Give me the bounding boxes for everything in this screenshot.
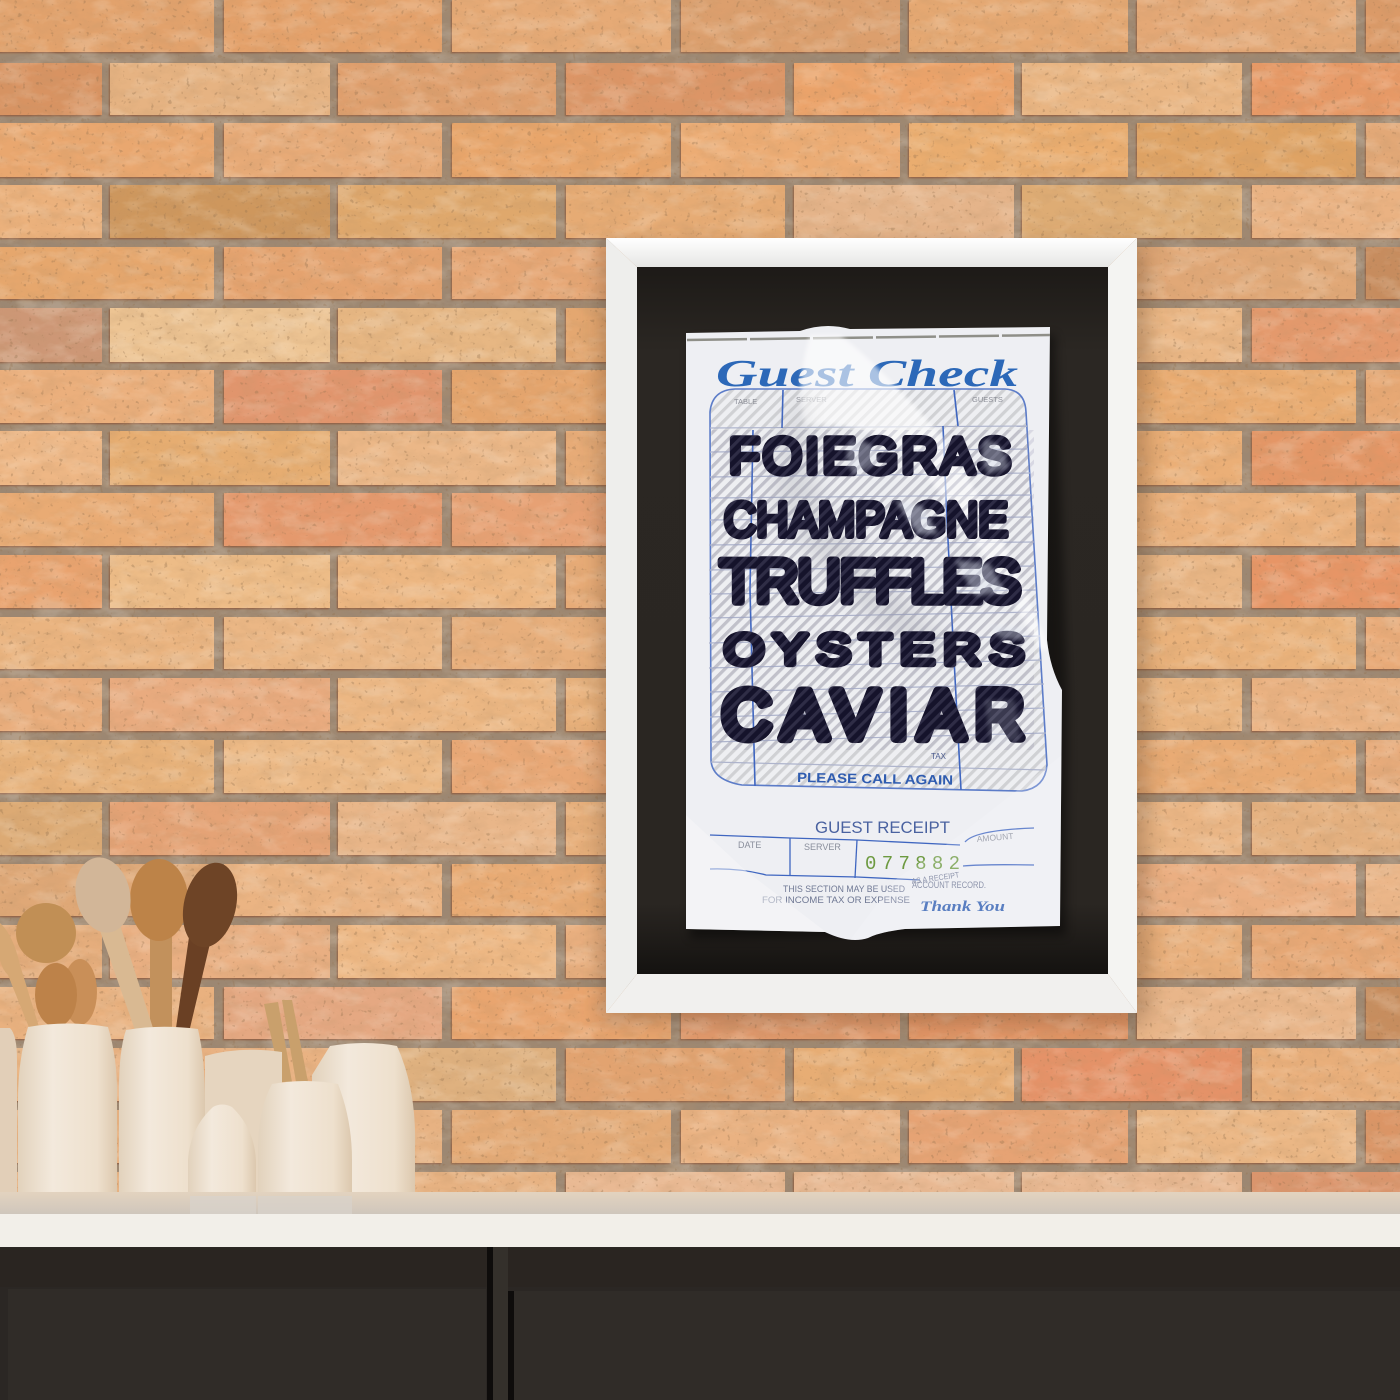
TAX label: TAX [931,752,947,761]
round wooden spoon [16,903,76,963]
thank you: Thank You [920,899,1005,915]
header labels: SERVER [796,395,827,404]
frame bottom rail [606,974,1137,1013]
dark cabinets [0,1247,1400,1400]
crumple highlights over text [712,430,1034,750]
spoon handle [98,925,153,1030]
dark mat [637,267,1108,974]
counter front edge [0,1214,1400,1247]
reflection small vase [190,1196,256,1214]
amount label: AMOUNT [976,831,1014,844]
fine print line 1 right: AS A RECEIPT [911,870,960,886]
vase far left [0,1028,17,1192]
perforated top strip [687,335,1050,340]
bottom fold shading [686,755,1062,940]
frame top rail [606,238,1137,267]
spoon handle [150,925,172,1030]
spoon head [130,859,188,941]
cabinet gap right shadow [508,1291,514,1400]
highlight on champagne [895,500,938,534]
frame shadow [600,245,1148,1023]
paper shadow [690,335,1068,938]
tall vase two [119,1027,205,1192]
fold highlight band [801,335,1050,650]
egg shape right [63,959,97,1025]
item: oysters: OYSTERS [724,626,1024,674]
stick two [282,1000,308,1082]
cabinet center post [493,1247,508,1400]
item: truffles: TRUFFLES [720,548,1021,615]
ledger table [709,389,1047,791]
dark wooden spoon [175,857,245,1028]
ceramic vases [0,1024,415,1196]
header labels: GUESTS [972,395,1003,404]
countertop [0,1192,1400,1247]
please call again: PLEASE CALL AGAIN [797,770,953,788]
ledger outline and hatch [710,389,1047,791]
cabinet top strip left [0,1248,488,1287]
heading: Guest Check: Guest Check [716,353,1018,395]
highlight on caviar [985,700,1020,745]
item: caviar: CAVIAR [722,677,1024,753]
header labels: TABLE [734,397,757,406]
vase back left [205,1050,282,1195]
pale spoon left [0,920,40,1030]
frame left rail [606,238,637,1013]
reflection wide vase [258,1196,352,1214]
bottom left fold [692,868,828,934]
counter surface [0,1192,1400,1214]
cabinet door left [8,1289,486,1400]
fine print line 2 left: FOR INCOME TAX OR EXPENSE [762,895,910,906]
fine print line 2 right: ACCOUNT RECORD. [912,880,986,891]
fold shadow [772,402,944,658]
highlight on G of FOIEGRAS [847,441,878,476]
stick one [264,1002,292,1082]
bottom right fold [850,755,1062,940]
menu items [720,428,1024,753]
white picture frame [606,238,1137,1013]
wide vase [258,1081,352,1195]
small bud vase [188,1104,256,1196]
ledger rows [709,426,1046,770]
vase reflections [190,1196,352,1214]
receipt fine print [762,870,986,906]
pale wooden spoon [69,852,153,1030]
egg shape left [35,963,77,1027]
cabinet top strip right [508,1248,1400,1287]
cabinet gap left shadow [487,1247,493,1400]
receipt lines [710,828,1034,880]
receipt table [710,828,1034,880]
header labels [734,395,1003,406]
highlight on LE of truffles [955,560,1005,596]
vase back right [312,1043,415,1193]
tall wooden sticks [264,1000,308,1082]
highlight on oysters [990,625,1024,640]
ledger columns [750,390,961,790]
tall vase one [18,1024,117,1192]
server label: SERVER [804,842,841,852]
back wooden spoon [130,859,188,1030]
spoon head [69,852,137,938]
cabinet door right [514,1291,1400,1400]
paper sheet [686,326,1062,940]
check number: 077882 [865,853,960,875]
item: champagne: CHAMPAGNE [724,494,1008,547]
ink stripe sheen [712,430,1034,750]
spoon handle [176,930,212,1028]
frame right rail [1108,238,1137,1013]
guest receipt heading: GUEST RECEIPT [815,818,950,837]
spoon head [175,857,245,953]
highlight on S of FOIEGRAS [982,440,1008,474]
utensils [0,852,308,1082]
guest check paper [686,326,1062,940]
date label: DATE [738,840,761,850]
item: foie gras: FOIEGRAS [729,428,1011,484]
fine print line 1 left: THIS SECTION MAY BE USED [783,884,905,895]
crumple shading below text [775,335,1050,665]
